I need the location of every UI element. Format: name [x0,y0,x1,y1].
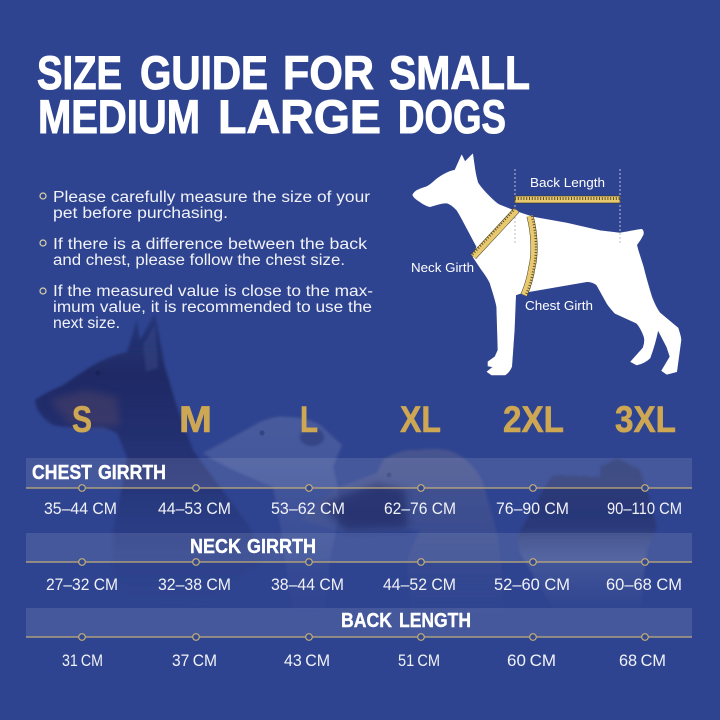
size headings [72,399,676,440]
panel: back length row: 43 CM [284,652,330,670]
panel: back length row: 51 CM [398,652,440,670]
icon: dog silhouette [413,154,681,375]
photo: terrier [517,458,657,610]
tip 3 [40,283,373,332]
heading: back length: BACK [341,609,392,632]
tip 2: and chest, please follow the chest size. [53,252,345,269]
panel: neck girth row: 38–44 CM [271,576,344,594]
panel: neck girth row: 32–38 CM [158,576,231,594]
heading: chest girth: GIRRTH [98,461,166,484]
instructions text block [40,189,373,332]
background dog photos [35,313,657,615]
label: chest girth: Chest Girth [525,299,593,313]
title: FOR [283,46,374,99]
panel: chest girth row: 62–76 CM [384,500,456,518]
tip 3: If the measured value is close to the max- [53,283,373,300]
neck girth tape [472,208,517,257]
heading: neck girth [190,535,316,558]
title: SMALL [389,46,530,99]
photo: greyhound [203,417,342,615]
back length guide lines [515,169,620,244]
chest girth tape [524,216,536,295]
heading: neck girth: GIRRTH [247,535,316,558]
panel: neck girth row: 27–32 CM [46,576,118,594]
size headings: S [72,399,92,440]
title: SIZE [37,46,122,99]
title [37,46,530,143]
tip 2 [40,236,367,269]
panel: chest girth row: 90–110 CM [607,500,682,518]
back length tape [515,196,620,203]
panel: back length row: 31 CM [62,652,103,670]
panel: neck girth row: 44–52 CM [383,576,456,594]
tip 1: pet before purchasing. [53,205,228,222]
panel: back length row: 60 CM [507,652,556,670]
panel: chest girth row: 44–53 CM [158,500,231,518]
panel: chest girth row [26,458,692,518]
panel: neck girth row: 52–60 CM [494,576,570,594]
tip 3: imum value, it is recommended to use the [53,299,372,316]
panel: back length row [26,608,692,670]
photo: doberman [35,313,262,605]
panel: neck girth row [26,533,692,594]
title: DOGS [398,90,506,143]
panel: chest girth row: 76–90 CM [496,500,569,518]
heading: chest girth [32,461,166,484]
heading: back length: LENGTH [399,609,471,632]
label: back length: Back Length [530,176,605,190]
dog measurement diagram [411,154,681,375]
panel: neck girth row: 60–68 CM [606,576,682,594]
size headings: XL [400,399,441,440]
size headings: 3XL [615,399,676,440]
panel: chest girth row: 35–44 CM [44,500,117,518]
title: LARGE [218,90,381,143]
size headings: M [179,399,212,440]
heading: chest girth: CHEST [32,461,92,484]
tip 2: If there is a difference between the back [53,236,367,253]
panel: back length row: 37 CM [172,652,217,670]
tip 3: next size. [53,315,120,332]
heading: back length [341,609,471,632]
title: GUIDE [140,46,268,99]
tip 1 [40,189,370,222]
photo: brown dog [300,449,505,615]
panel: chest girth row: 53–62 CM [271,500,345,518]
heading: neck girth: NECK [190,535,241,558]
size headings: L [300,399,318,440]
tip 1: Please carefully measure the size of your [53,189,370,206]
panel: back length row: 68 CM [619,652,666,670]
size headings: 2XL [503,399,564,440]
title: MEDIUM [38,90,200,143]
label: neck girth: Neck Girth [411,261,474,275]
